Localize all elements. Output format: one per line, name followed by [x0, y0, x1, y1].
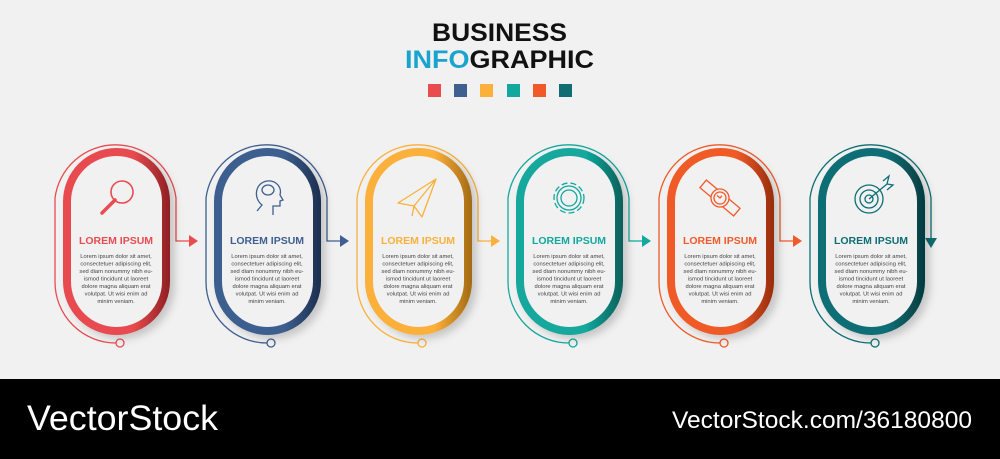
step 4 card: minim veniam.	[550, 299, 588, 305]
icon: gear	[554, 183, 584, 213]
step 5 card	[659, 145, 802, 347]
step 4 card: ismod tincidunt ut laoreet	[537, 276, 602, 282]
title: BUSINESS	[432, 19, 567, 47]
step 6 card: dolore magna aliquam erat	[837, 284, 906, 290]
step 1 card: ismod tincidunt ut laoreet	[84, 276, 149, 282]
step 2 card: volutpat. Ut wisi enim ad	[236, 292, 298, 298]
step 3 card: ismod tincidunt ut laoreet	[386, 276, 451, 282]
step 2 card	[206, 145, 349, 347]
step 3 card: consectetuer adipiscing elit,	[382, 262, 454, 268]
step 6 card: LOREM IPSUM	[834, 235, 908, 247]
step 1 card: sed diam nonummy nibh eu-	[79, 269, 153, 275]
step 1 card: consectetuer adipiscing elit,	[80, 262, 152, 268]
step 6 card: Lorem ipsum dolor sit amet,	[835, 254, 907, 260]
icon: target	[855, 176, 893, 213]
title	[405, 19, 594, 74]
step 3 card: dolore magna aliquam erat	[384, 284, 453, 290]
step 3 card	[357, 145, 500, 347]
step 2 card: minim veniam.	[248, 299, 286, 305]
step 4 card: Lorem ipsum dolor sit amet,	[533, 254, 605, 260]
step 4 card: dolore magna aliquam erat	[535, 284, 604, 290]
step 6 card: consectetuer adipiscing elit,	[835, 262, 907, 268]
step 5 card: Lorem ipsum dolor sit amet,	[684, 254, 756, 260]
step 3 card: sed diam nonummy nibh eu-	[381, 269, 455, 275]
step 4 card: sed diam nonummy nibh eu-	[532, 269, 606, 275]
step 4 card: consectetuer adipiscing elit,	[533, 262, 605, 268]
step 6 card: volutpat. Ut wisi enim ad	[840, 292, 902, 298]
footer band: VectorStock.com/36180800	[672, 407, 972, 434]
title: INFOGRAPHIC	[405, 46, 594, 74]
step 2 card: ismod tincidunt ut laoreet	[235, 276, 300, 282]
step 3 card: minim veniam.	[399, 299, 437, 305]
step 4 card	[508, 145, 651, 347]
step 5 card: consectetuer adipiscing elit,	[684, 262, 756, 268]
step 5 card: sed diam nonummy nibh eu-	[683, 269, 757, 275]
footer band	[0, 379, 1000, 459]
step 2 card: dolore magna aliquam erat	[233, 284, 302, 290]
icon: wristwatch	[697, 177, 743, 219]
step 2 card: LOREM IPSUM	[230, 235, 304, 247]
step 6 card: minim veniam.	[852, 299, 890, 305]
icon: magnifier	[102, 181, 133, 213]
step 6 card	[810, 145, 937, 347]
step 4 card: volutpat. Ut wisi enim ad	[538, 292, 600, 298]
step 1 card: volutpat. Ut wisi enim ad	[85, 292, 147, 298]
step 6 card: ismod tincidunt ut laoreet	[839, 276, 904, 282]
step 5 card: LOREM IPSUM	[683, 235, 757, 247]
color squares	[428, 84, 572, 97]
step 1 card: LOREM IPSUM	[79, 235, 153, 247]
step 1 card	[55, 145, 198, 347]
step 2 card: sed diam nonummy nibh eu-	[230, 269, 304, 275]
step 4 card: LOREM IPSUM	[532, 235, 606, 247]
footer band: VectorStock	[27, 399, 219, 438]
icon: head with brain	[256, 181, 283, 215]
step 3 card: Lorem ipsum dolor sit amet,	[382, 254, 454, 260]
step 6 card: sed diam nonummy nibh eu-	[834, 269, 908, 275]
step 5 card: minim veniam.	[701, 299, 739, 305]
step 5 card: volutpat. Ut wisi enim ad	[689, 292, 751, 298]
step 2 card: Lorem ipsum dolor sit amet,	[231, 254, 303, 260]
step 3 card: volutpat. Ut wisi enim ad	[387, 292, 449, 298]
icon: paper plane	[398, 179, 436, 217]
step 1 card: Lorem ipsum dolor sit amet,	[80, 254, 152, 260]
step 3 card: LOREM IPSUM	[381, 235, 455, 247]
step 5 card: dolore magna aliquam erat	[686, 284, 755, 290]
step 1 card: minim veniam.	[97, 299, 135, 305]
step 5 card: ismod tincidunt ut laoreet	[688, 276, 753, 282]
step 2 card: consectetuer adipiscing elit,	[231, 262, 303, 268]
step 1 card: dolore magna aliquam erat	[82, 284, 151, 290]
